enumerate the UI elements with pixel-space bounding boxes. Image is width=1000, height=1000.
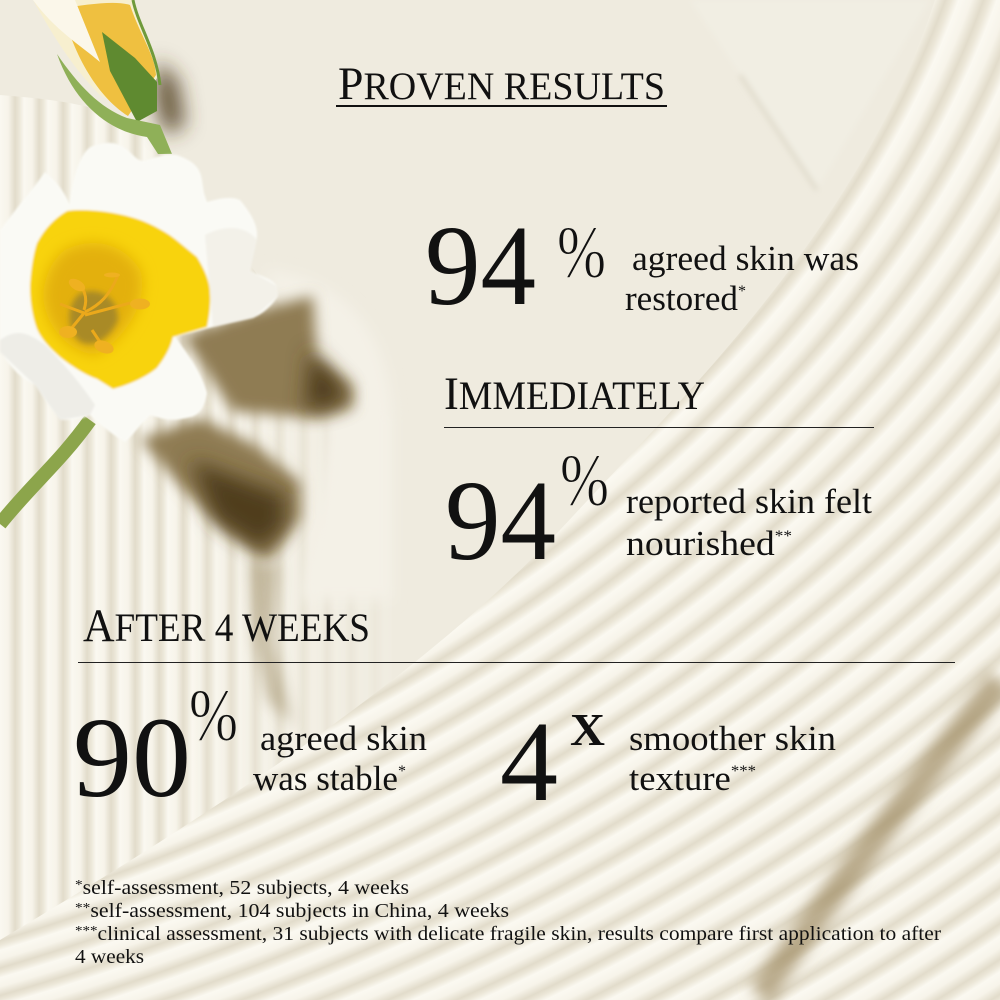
stat: 4x smoother: X	[570, 704, 605, 755]
stat: 94% nourished: **	[775, 528, 792, 545]
stat: 4x smoother: 4	[500, 698, 558, 825]
stat: 94% nourished: 94	[445, 457, 556, 584]
stat: 94% restored	[425, 202, 859, 329]
background: crease in plateau	[690, 0, 930, 190]
stat: 4x smoother: ***	[731, 763, 756, 780]
footnotes: **	[75, 901, 90, 916]
stat: 94% nourished: reported skin felt	[626, 482, 872, 521]
footnotes: 4 weeks	[75, 946, 144, 968]
stat: 4x smoother: texture	[629, 759, 726, 798]
icon: flower stem	[0, 420, 90, 524]
footnotes: self-assessment, 52 subjects, 4 weeks	[83, 877, 409, 899]
footnotes: self-assessment, 104 subjects in China, 4 weeks	[90, 900, 509, 922]
footnotes: ***	[75, 924, 98, 939]
footnotes: *	[75, 878, 83, 893]
shadow band lower right	[760, 680, 1000, 995]
stat: 90% stable	[73, 675, 427, 821]
stat: 90% stable: agreed skin	[260, 719, 427, 758]
stat: 94% restored: agreed skin was	[632, 239, 859, 278]
stat: 90% stable: 90	[73, 694, 191, 821]
heading: after 4 weeks: AFTER 4 WEEKS	[83, 600, 370, 652]
stat: 94% nourished: %	[560, 440, 609, 522]
stat: 94% restored: 94	[425, 202, 536, 329]
flower shadows	[140, 60, 353, 725]
stat: 94% restored: %	[557, 212, 606, 294]
stat: 4x smoother	[500, 698, 836, 825]
icon: flower bud	[33, 0, 172, 154]
stat: 90% stable: was stable	[253, 759, 398, 798]
stat: 94% restored: *	[738, 283, 746, 300]
stat: 4x smoother: smoother skin	[629, 719, 836, 758]
stat: 94% nourished: nourished	[626, 524, 764, 563]
stat: 90% stable: *	[398, 763, 406, 780]
stat: 94% nourished	[445, 440, 872, 584]
title: PROVEN RESULTS	[338, 58, 665, 110]
background: bright rim around shadow	[265, 270, 392, 600]
background: vertical ridges left	[0, 95, 280, 940]
footnotes	[75, 877, 941, 968]
stat: 94% restored: restored	[625, 279, 738, 318]
heading: immediately: IMMEDIATELY	[444, 368, 705, 420]
footnotes: clinical assessment, 31 subjects with delicate fragile skin, results compare first application to after	[98, 923, 941, 945]
icon: open flower	[0, 143, 278, 442]
stat: 90% stable: %	[189, 675, 238, 757]
